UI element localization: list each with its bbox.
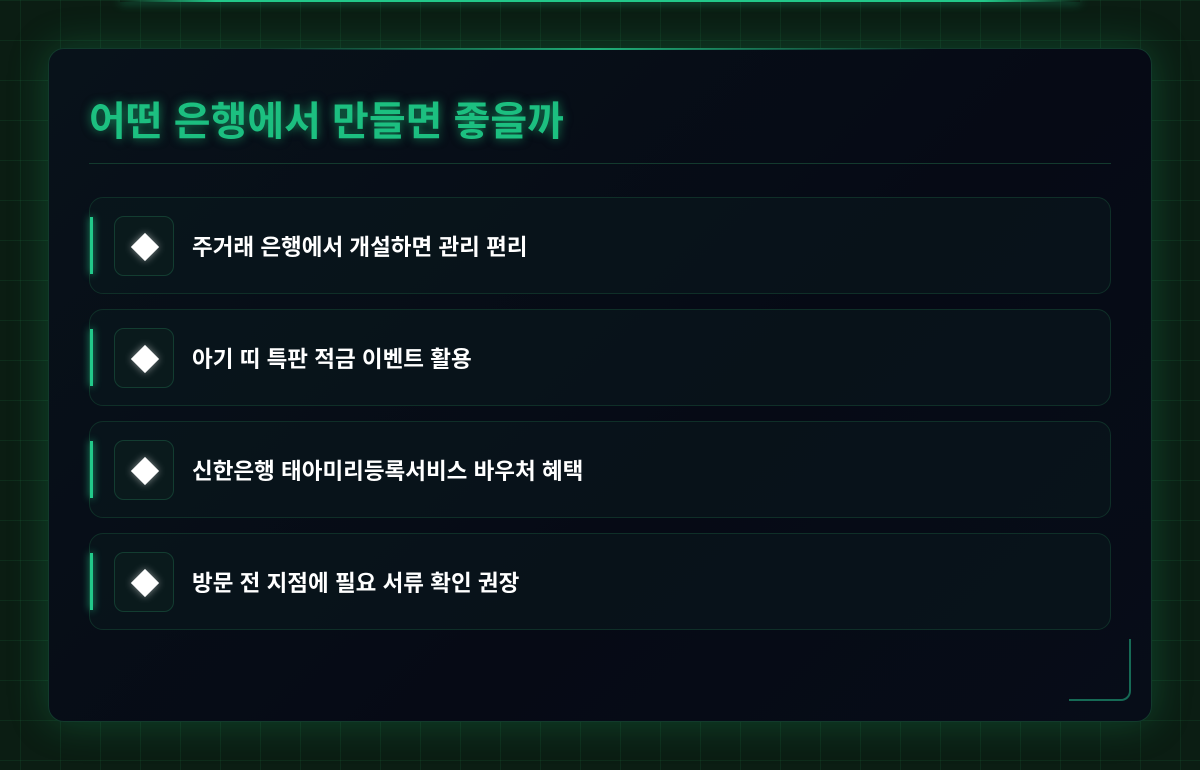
item 2: [89, 309, 1111, 406]
icon: diamond: [114, 440, 174, 500]
icon: diamond: [114, 216, 174, 276]
title: 어떤 은행에서 만들면 좋을까: [89, 100, 564, 144]
item 3: [89, 421, 1111, 518]
text: 방문 전 지점에 필요 서류 확인 권장: [192, 571, 519, 596]
icon: diamond: [114, 552, 174, 612]
item 4: [89, 533, 1111, 630]
icon: diamond: [114, 328, 174, 388]
text: 아기 띠 특판 적금 이벤트 활용: [192, 347, 472, 372]
text: 신한은행 태아미리등록서비스 바우처 혜택: [192, 459, 583, 484]
item 1: [89, 197, 1111, 294]
text: 주거래 은행에서 개설하면 관리 편리: [192, 235, 528, 260]
